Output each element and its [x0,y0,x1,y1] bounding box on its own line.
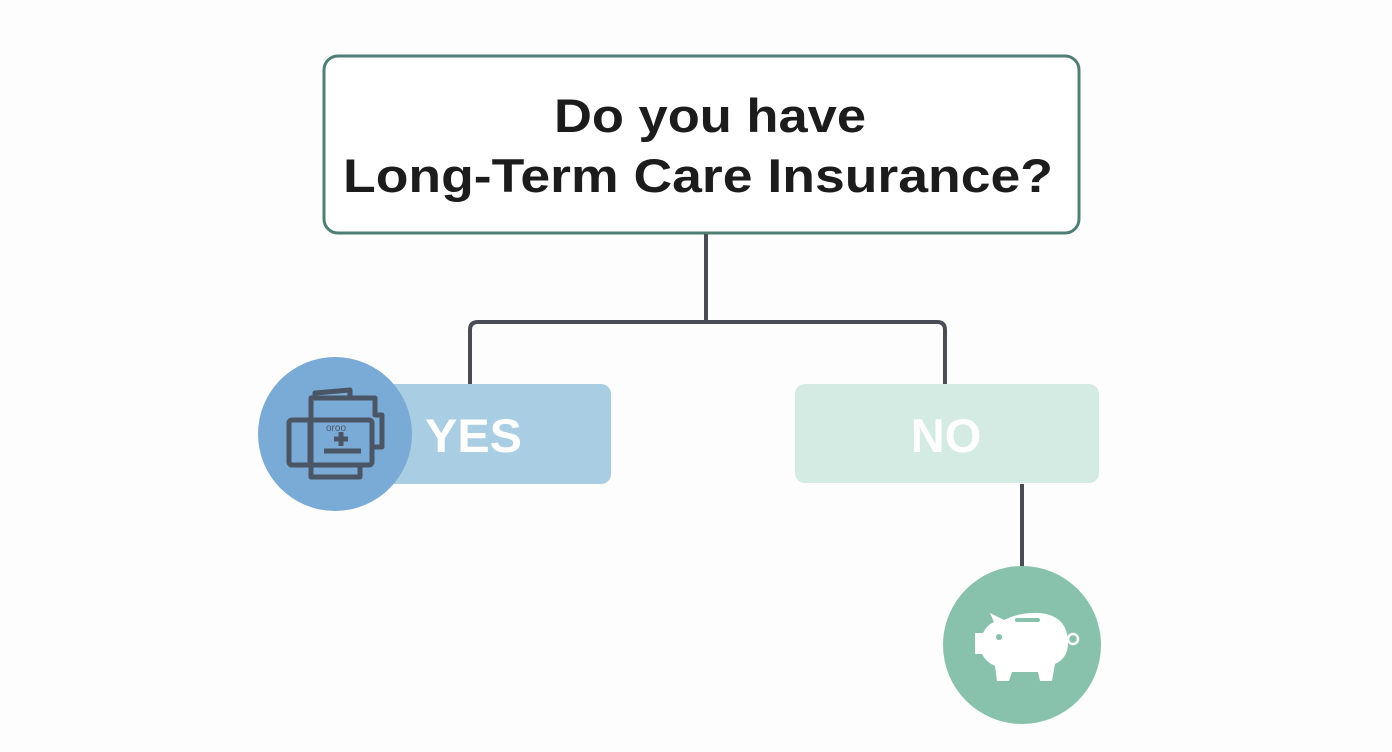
icon: piggy bank [943,566,1101,724]
no label: NO [911,409,981,462]
no branch [795,384,1099,483]
title text line 2: Long-Term Care Insurance? [343,149,1053,202]
connector to savings [1020,484,1024,567]
icon: insurance card: oroo [326,423,346,434]
title text: Do you have [554,89,866,142]
yes label: YES [425,409,522,462]
connector lines [470,234,945,384]
icon: insurance card [258,357,412,511]
yes branch [258,357,611,511]
title box [324,56,1079,233]
